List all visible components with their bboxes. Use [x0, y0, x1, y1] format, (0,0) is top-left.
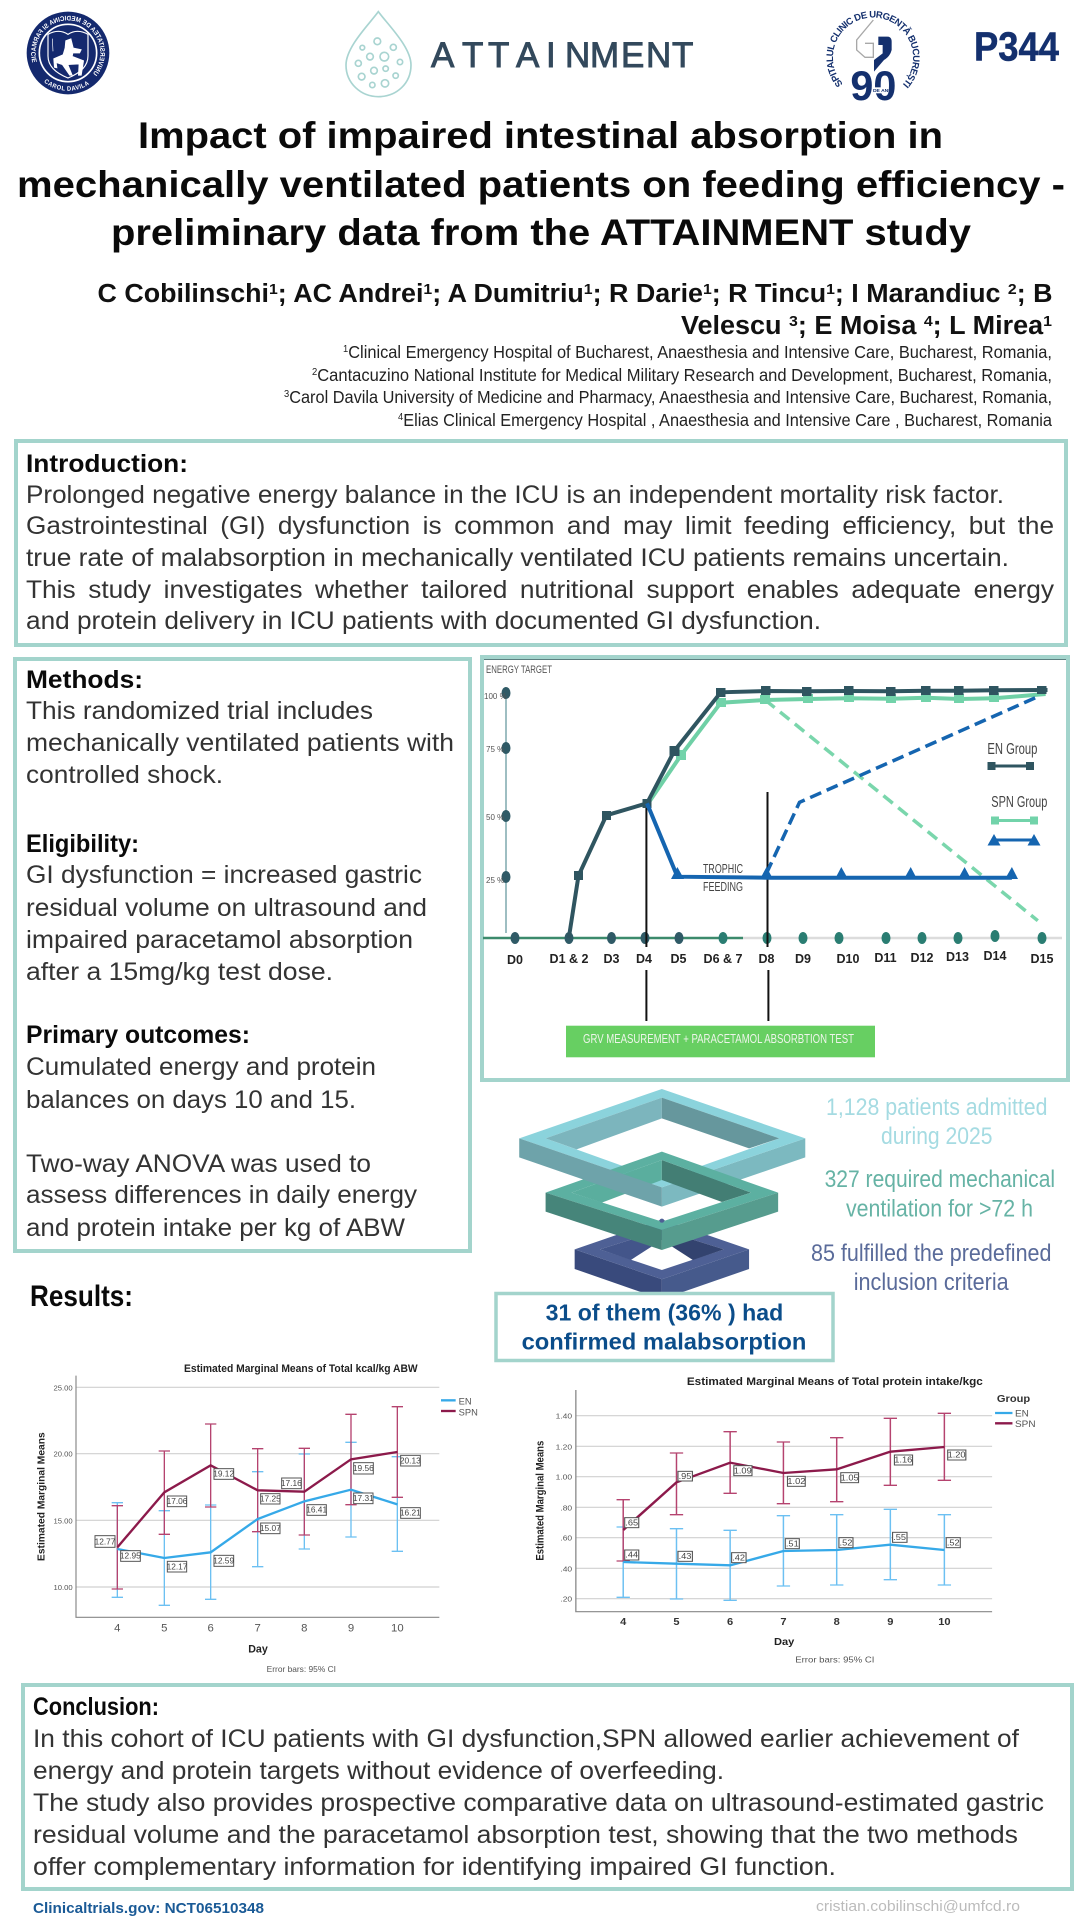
value labels: 1.09 — [734, 1466, 752, 1475]
gridlines and axes: 5 — [673, 1616, 680, 1628]
value labels: .52 — [840, 1538, 852, 1547]
text: statistics: assess differences in daily energy — [26, 1181, 418, 1209]
authors: 1 — [584, 281, 593, 298]
value labels: 17.16 — [281, 1478, 302, 1488]
series EN — [623, 1545, 944, 1565]
top frame front side — [519, 1138, 662, 1207]
chart title: Estimated Marginal Means of Total kcal/kg ABW — [184, 1363, 419, 1375]
gridlines and axes: Estimated Marginal Means — [36, 1432, 47, 1561]
legend — [441, 1396, 478, 1417]
value labels: 12.59 — [213, 1556, 234, 1566]
value labels: 1.16 — [894, 1455, 912, 1465]
timeline axis with day markers: D8 — [759, 952, 775, 966]
panel: introduction — [16, 441, 1066, 645]
text: introduction body: This study investigates whether tailored nutritional support enables adequate energy — [26, 576, 1055, 604]
logo: hospital 90 years: 90 — [850, 62, 896, 109]
series: SPN green — [647, 693, 1046, 805]
series: EN dark — [569, 686, 1048, 938]
affiliations — [284, 342, 1052, 430]
y axis with percent markers: 50 % — [486, 813, 504, 822]
text: patient flow — [811, 1094, 1055, 1296]
text: patient flow: ventilation for >72 h — [846, 1196, 1033, 1222]
callout: test label: GRV MEASUREMENT + PARACETAMOL ABSORBTION TEST — [583, 1031, 854, 1046]
funnel: stacked frames — [519, 1089, 805, 1299]
gridlines and axes: 1.20 — [556, 1443, 573, 1451]
gridlines and axes: 10.00 — [53, 1583, 73, 1592]
gridlines and axes: 20.00 — [53, 1450, 73, 1459]
value labels: 12.77 — [95, 1536, 116, 1546]
logo: Carol Davila university seal — [26, 12, 110, 94]
value labels: 1.20 — [948, 1450, 966, 1460]
value labels: 17.31 — [353, 1493, 374, 1503]
authors: 1 — [423, 281, 432, 298]
gridlines and axes: 10 — [938, 1616, 951, 1628]
timeline axis with day markers: D1 & 2 — [550, 952, 588, 966]
gridlines and axes: 1.00 — [556, 1473, 573, 1482]
gridlines and axes: .20 — [560, 1595, 573, 1604]
title: Impact of impaired intestinal absorption in — [138, 114, 943, 156]
legend: EN group: EN Group — [987, 741, 1037, 758]
authors: ; L Mirea — [933, 312, 1044, 340]
authors: ; A Dumitriu — [432, 280, 584, 308]
legend: SPN group — [988, 794, 1047, 846]
value labels: .51 — [786, 1539, 799, 1548]
value labels — [95, 1455, 421, 1572]
value labels: 20.13 — [400, 1455, 421, 1465]
text: introduction body: true rate of malabsorption in mechanically ventilated ICU patients remains uncertain. — [26, 544, 1009, 572]
logo: ATTAINMENT drop and wordmark — [346, 12, 693, 97]
line chart: total kcal/kg ABW — [36, 1363, 478, 1674]
timeline axis with day markers — [483, 930, 1062, 967]
text: patient flow: during 2025 — [881, 1123, 992, 1150]
text: eligibility body: after a 15mg/kg test dose. — [26, 958, 333, 986]
text: conclusion body: The study also provides prospective comparative data on ultrasound-estimated gastric — [33, 1789, 1044, 1817]
value labels: 1.05 — [841, 1473, 859, 1482]
value labels: .65 — [625, 1518, 638, 1527]
text: conclusion body: In this cohort of ICU patients with GI dysfunction,SPN allowed earlier achievement of — [33, 1725, 1019, 1753]
text: introduction body: Prolonged negative energy balance in the ICU is an independent mortality risk factor. — [26, 481, 1004, 509]
heading: primary outcomes: Primary outcomes: — [26, 1021, 250, 1049]
y axis with percent markers — [484, 687, 510, 933]
label: trophic feeding: TROPHIC — [703, 861, 743, 876]
timeline axis with day markers: D6 & 7 — [704, 952, 742, 966]
value labels: .95 — [679, 1471, 692, 1481]
footnote: Error bars: 95% CI — [267, 1664, 336, 1674]
footnote: Error bars: 95% CI — [795, 1655, 874, 1665]
gridlines and axes: 1.40 — [556, 1412, 573, 1421]
text: introduction body: Gastrointestinal (GI) dysfunction is common and may limit feeding efficiency, but the — [26, 512, 1054, 540]
heading: energy target: ENERGY TARGET — [486, 664, 552, 676]
value labels: .42 — [732, 1553, 745, 1562]
timeline axis with day markers: D11 — [874, 951, 897, 965]
y axis with percent markers: 100 % — [484, 692, 507, 701]
legend — [995, 1393, 1036, 1430]
y axis with percent markers: 25 % — [486, 876, 504, 885]
icon: water drop — [346, 12, 411, 97]
heading: methods: Methods: — [26, 666, 143, 694]
line chart: total protein intake/kg — [535, 1376, 1036, 1665]
heading: introduction: Introduction: — [26, 450, 188, 478]
affiliations: Clinical Emergency Hospital of Bucharest, Anaesthesia and Intensive Care, Bucharest, Romania, — [348, 342, 1052, 362]
authors — [98, 280, 1052, 340]
timeline axis with day markers: D9 — [795, 952, 811, 966]
gridlines and axes: 8 — [301, 1622, 307, 1634]
series: SPN dashed declining — [765, 700, 1038, 921]
text: eligibility body: GI dysfunction = increased gastric — [26, 861, 422, 889]
footer: trial registration: Clinicaltrials.gov: NCT06510348 — [33, 1900, 264, 1917]
callout: malabsorption: confirmed malabsorption — [522, 1328, 806, 1354]
text: introduction body — [26, 481, 1055, 635]
timeline axis with day markers: D4 — [636, 952, 652, 966]
legend: EN — [459, 1396, 472, 1406]
legend: EN group — [987, 741, 1037, 770]
authors: 4 — [924, 313, 933, 330]
text: statistics — [26, 1150, 418, 1242]
timeline axis with day markers: D0 — [507, 953, 523, 967]
label: trophic feeding: FEEDING — [703, 879, 743, 894]
gridlines and axes: 8 — [834, 1616, 840, 1628]
timeline axis with day markers: D5 — [671, 952, 687, 966]
gridlines and axes — [535, 1390, 992, 1648]
gridlines and axes: Day — [774, 1636, 794, 1648]
authors: ; I Marandiuc — [835, 280, 1008, 308]
text: methods body: This randomized trial includes — [26, 697, 373, 725]
value labels: 17.25 — [260, 1494, 281, 1504]
series EN — [117, 1490, 397, 1558]
gridlines and axes: 9 — [887, 1616, 894, 1628]
authors: ; R Tincu — [712, 280, 826, 308]
authors: 1 — [1043, 313, 1052, 330]
top frame — [519, 1089, 805, 1207]
text: methods body — [26, 697, 454, 789]
text: patient flow: 85 fulfilled the predefined — [811, 1240, 1052, 1267]
timeline axis with day markers: D10 — [837, 952, 860, 966]
gridlines and axes: .40 — [560, 1565, 573, 1573]
affiliations: 3 — [284, 389, 290, 400]
legend: SPN — [1015, 1419, 1036, 1430]
timeline axis with day markers: D3 — [604, 952, 620, 966]
text: methods body: mechanically ventilated patients with — [26, 729, 454, 757]
panel: methods — [15, 659, 470, 1251]
text: statistics: and protein intake per kg of ABW — [26, 1214, 405, 1242]
panel: conclusion — [23, 1685, 1072, 1889]
authors: C Cobilinschi — [98, 280, 260, 308]
value labels — [625, 1450, 966, 1563]
gridlines and axes: 7 — [255, 1622, 261, 1634]
gridlines and axes: .60 — [560, 1534, 573, 1543]
gridlines and axes: 4 — [114, 1622, 120, 1634]
heading: conclusion: Conclusion: — [33, 1693, 159, 1721]
value labels: 17.06 — [167, 1496, 188, 1506]
series SPN — [623, 1447, 944, 1530]
bottom frame — [575, 1219, 749, 1299]
gridlines and axes: Day — [248, 1643, 268, 1655]
authors: ; E Moisa — [798, 312, 924, 340]
text: primary outcomes body: Cumulated energy and protein — [26, 1053, 376, 1081]
callout: malabsorption: 31 of them (36% ) had — [546, 1300, 783, 1326]
callout: test label — [566, 1026, 875, 1057]
timeline axis with day markers: D12 — [911, 951, 934, 965]
logo: hospital 90 years: SPITALUL CLINIC DE URGENȚĂ BUCUREȘTI — [826, 10, 920, 88]
value labels: 12.95 — [120, 1551, 141, 1561]
wordmark: ATTAINMENT — [431, 36, 693, 75]
title — [17, 114, 1065, 253]
value labels: 19.12 — [213, 1469, 234, 1479]
arrow lines: measurement days — [646, 792, 768, 1021]
text: primary outcomes body — [26, 1053, 376, 1114]
text: conclusion body: residual volume and the paracetamol absorption test, showing that the two methods — [33, 1821, 1018, 1849]
panel: energy target study design chart — [482, 657, 1068, 1080]
value labels: .43 — [679, 1551, 692, 1561]
text: primary outcomes body: balances on days 10 and 15. — [26, 1086, 356, 1114]
footer: contact email: cristian.cobilinschi@umfcd.ro — [816, 1898, 1020, 1915]
logo: Carol Davila university seal: UNIVERSITATEA DE MEDICINA SI FARMACIE — [31, 16, 105, 76]
gridlines and axes: 9 — [348, 1622, 354, 1634]
gridlines and axes: 25.00 — [53, 1383, 73, 1392]
value labels: 15.07 — [260, 1523, 281, 1533]
error bars EN — [617, 1509, 951, 1600]
text: conclusion body: offer complementary information for identifying impaired GI function. — [33, 1853, 836, 1881]
gridlines and axes — [36, 1376, 439, 1655]
text: eligibility body — [26, 861, 427, 986]
authors: ; AC Andrei — [278, 280, 423, 308]
timeline axis with day markers: D13 — [946, 950, 969, 964]
gridlines and axes: 5 — [161, 1622, 167, 1634]
logo: Carol Davila university seal: CAROL DAVILA — [44, 79, 90, 91]
affiliations: Elias Clinical Emergency Hospital , Anaesthesia and Intensive Care , Bucharest, Romania — [403, 410, 1052, 430]
poster number: P344 — [974, 24, 1059, 70]
text: conclusion body: energy and protein targets without evidence of overfeeding. — [33, 1757, 724, 1785]
gridlines and axes: 7 — [780, 1616, 787, 1628]
series SPN — [117, 1452, 397, 1547]
affiliations: 1 — [343, 344, 349, 355]
gridlines and axes: Estimated Marginal Means — [535, 1440, 547, 1561]
logo: hospital 90 years: DE ANI — [873, 88, 890, 94]
gridlines and axes: .80 — [560, 1504, 573, 1512]
label: trophic feeding — [703, 861, 743, 894]
error bars SPN — [112, 1407, 403, 1589]
affiliations: Cantacuzino National Institute for Medical Military Research and Development, Bucharest, Romania, — [317, 365, 1052, 385]
text: methods body: controlled shock. — [26, 761, 223, 789]
value labels: .52 — [947, 1538, 960, 1547]
text: eligibility body: impaired paracetamol absorption — [26, 926, 413, 954]
title: preliminary data from the ATTAINMENT study — [111, 211, 971, 253]
y axis with percent markers: 75 % — [486, 745, 504, 754]
authors: ; B — [1017, 280, 1052, 308]
value labels: .55 — [893, 1532, 906, 1542]
text: eligibility body: residual volume on ultrasound and — [26, 894, 427, 922]
error bars EN — [112, 1442, 403, 1605]
timeline axis with day markers: D14 — [984, 949, 1007, 963]
authors: 3 — [789, 313, 798, 330]
value labels: 19.56 — [353, 1463, 374, 1473]
value labels: 16.21 — [400, 1508, 421, 1518]
legend: EN — [1015, 1409, 1029, 1420]
error bars SPN — [617, 1413, 951, 1561]
callout: malabsorption — [496, 1294, 833, 1360]
title: mechanically ventilated patients on feeding efficiency - — [17, 163, 1065, 205]
heading: eligibility: Eligibility: — [26, 830, 139, 858]
value labels: 1.02 — [787, 1476, 805, 1486]
chart title: Estimated Marginal Means of Total protein intake/kgc — [687, 1376, 983, 1388]
gridlines and axes: 10 — [391, 1622, 404, 1634]
text: statistics: Two-way ANOVA was used to — [26, 1150, 371, 1178]
authors: ; R Darie — [593, 280, 703, 308]
gridlines and axes: 15.00 — [53, 1516, 73, 1525]
affiliations: 2 — [312, 367, 318, 378]
value labels: 16.41 — [306, 1505, 327, 1515]
legend: Group — [997, 1393, 1031, 1405]
heading: results: Results: — [30, 1280, 133, 1313]
timeline axis with day markers: D15 — [1031, 952, 1054, 966]
text: patient flow: inclusion criteria — [854, 1269, 1009, 1296]
middle frame — [546, 1152, 778, 1250]
authors: 1 — [269, 281, 278, 298]
legend: SPN group: SPN Group — [991, 794, 1047, 811]
authors: 2 — [1008, 281, 1017, 298]
gridlines and axes: 6 — [208, 1622, 214, 1634]
value labels: .44 — [625, 1550, 638, 1560]
text: patient flow: 1,128 patients admitted — [826, 1094, 1048, 1121]
value labels: 12.17 — [167, 1561, 188, 1571]
affiliations: 4 — [398, 412, 404, 423]
text: introduction body: and protein delivery in ICU patients with documented GI dysfunction. — [26, 607, 821, 635]
gridlines and axes: 4 — [620, 1616, 626, 1628]
authors: 1 — [703, 281, 712, 298]
series: SPN trophic blue — [647, 697, 1038, 879]
authors: Velescu — [681, 312, 776, 340]
text: conclusion body — [33, 1725, 1044, 1881]
authors: 1 — [826, 281, 835, 298]
gridlines and axes: 6 — [727, 1616, 733, 1628]
legend: SPN — [459, 1407, 478, 1417]
